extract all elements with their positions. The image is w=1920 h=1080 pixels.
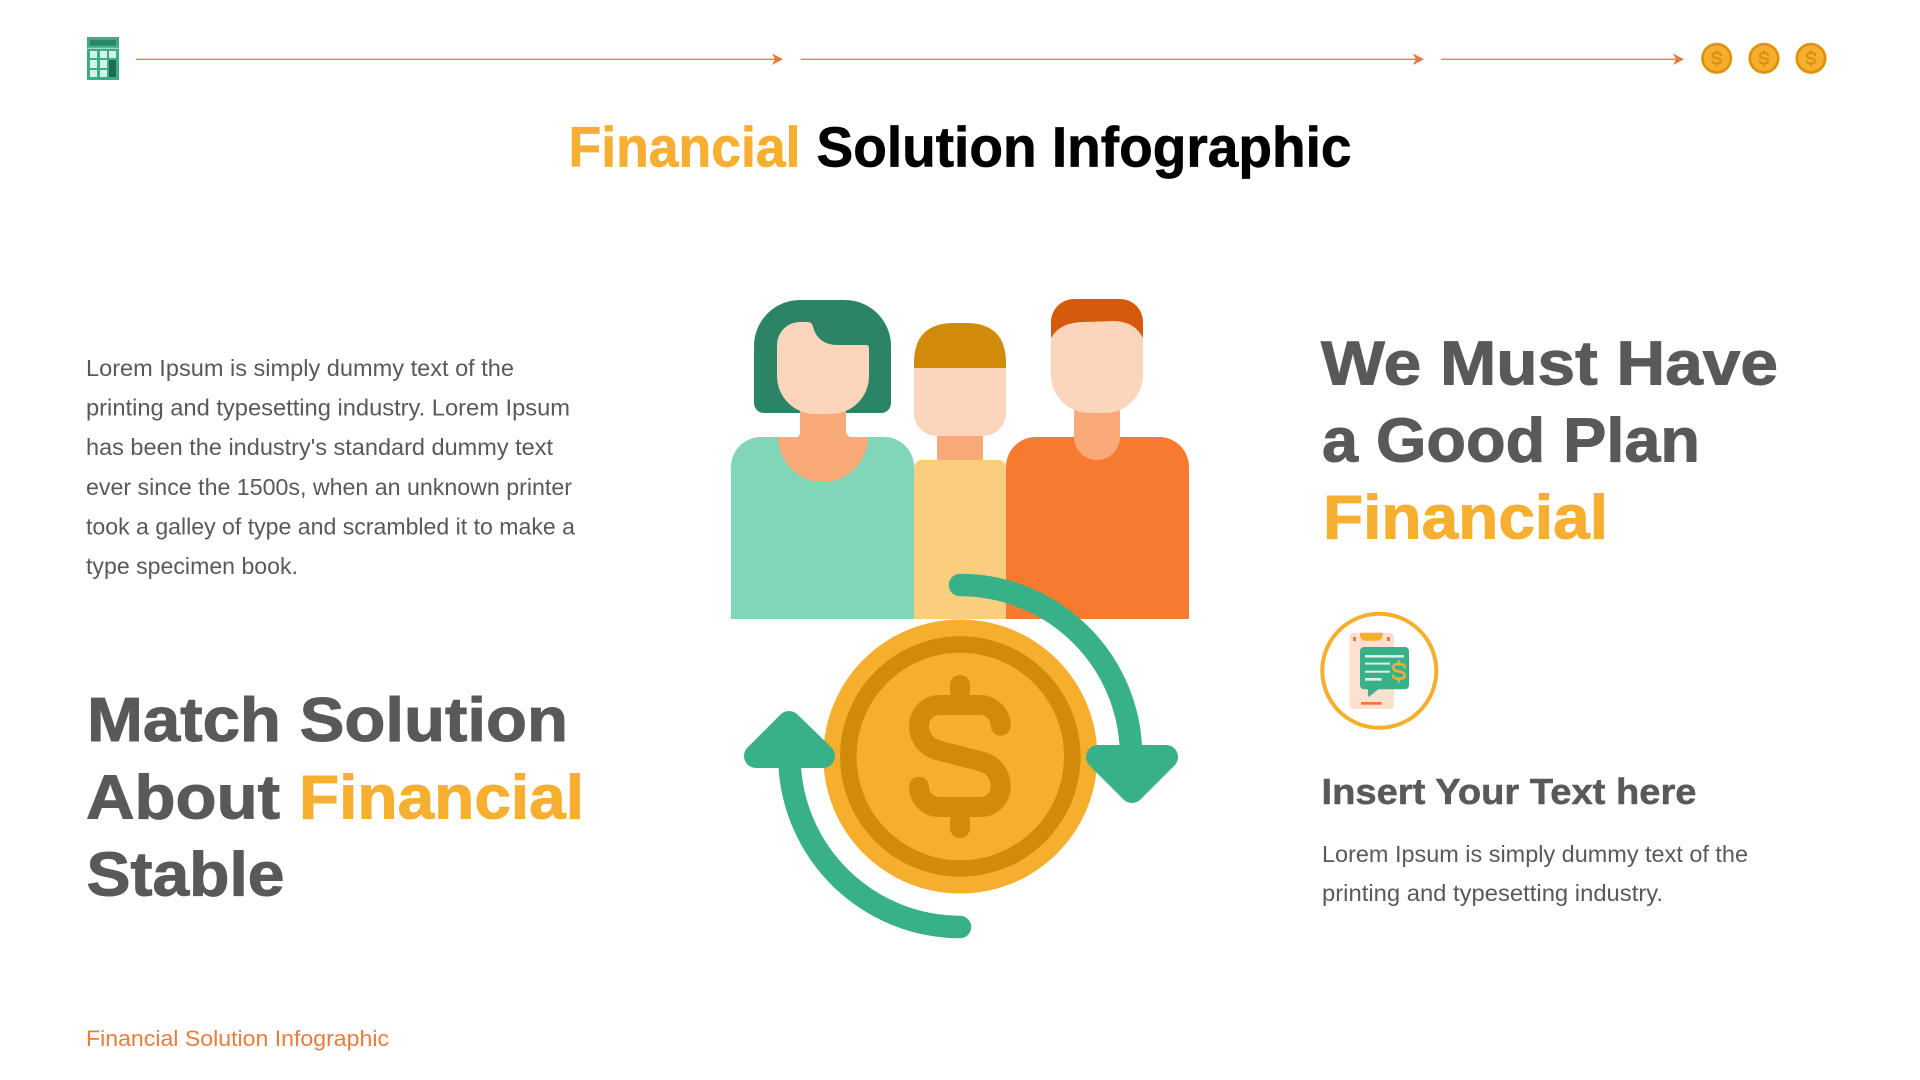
title: Solution Infographic xyxy=(816,116,1352,180)
heading: match solution: Financial xyxy=(299,764,584,832)
text block: intro paragraph: Lorem Ipsum is simply dummy text of the xyxy=(86,355,514,381)
arrow: second timeline segment xyxy=(801,54,1424,65)
icon: coin two xyxy=(1748,43,1780,74)
title xyxy=(568,116,1352,180)
person: right xyxy=(1006,299,1189,619)
text block: intro paragraph: type specimen book. xyxy=(86,553,298,579)
heading: match solution: Stable xyxy=(86,840,284,910)
arrow: clockwise left xyxy=(756,723,960,927)
text block: intro paragraph: printing and typesetting industry. Lorem Ipsum xyxy=(86,394,570,420)
icon: calculator xyxy=(87,37,119,80)
person: left xyxy=(731,300,914,619)
heading: insert your text: Insert Your Text here xyxy=(1322,771,1696,812)
text block: intro paragraph: has been the industry's standard dummy text xyxy=(86,434,554,460)
text block: intro paragraph: ever since the 1500s, when an unknown printer xyxy=(86,474,572,500)
heading: good plan: We Must Have xyxy=(1321,330,1778,398)
illustration: three people xyxy=(731,299,1189,619)
heading: good plan xyxy=(1321,330,1778,552)
icon: coin three xyxy=(1795,43,1827,74)
heading: match solution xyxy=(86,686,584,910)
text block: right paragraph: printing and typesetting industry. xyxy=(1322,880,1663,906)
person: middle xyxy=(914,323,1006,619)
arrow: third timeline segment xyxy=(1441,54,1684,65)
icon: coin one xyxy=(1701,43,1732,74)
text block: intro paragraph: took a galley of type and scrambled it to make a xyxy=(86,514,575,540)
heading: match solution: Match Solution xyxy=(87,686,568,755)
heading: good plan: a Good Plan xyxy=(1322,406,1700,476)
illustration: dollar coin xyxy=(823,620,1097,894)
heading: match solution: About xyxy=(86,764,280,832)
icon: phone with chat bubble in circle xyxy=(1322,614,1436,728)
text block: right paragraph: Lorem Ipsum is simply dummy text of the xyxy=(1322,841,1748,867)
footer label: Financial Solution Infographic xyxy=(86,1026,389,1051)
arrow: clockwise right xyxy=(960,585,1166,791)
arrow: first timeline segment xyxy=(136,54,783,65)
heading: good plan: Financial xyxy=(1323,484,1608,552)
text block: right paragraph xyxy=(1322,841,1748,906)
title: Financial xyxy=(568,116,800,180)
text block: intro paragraph xyxy=(86,355,575,579)
